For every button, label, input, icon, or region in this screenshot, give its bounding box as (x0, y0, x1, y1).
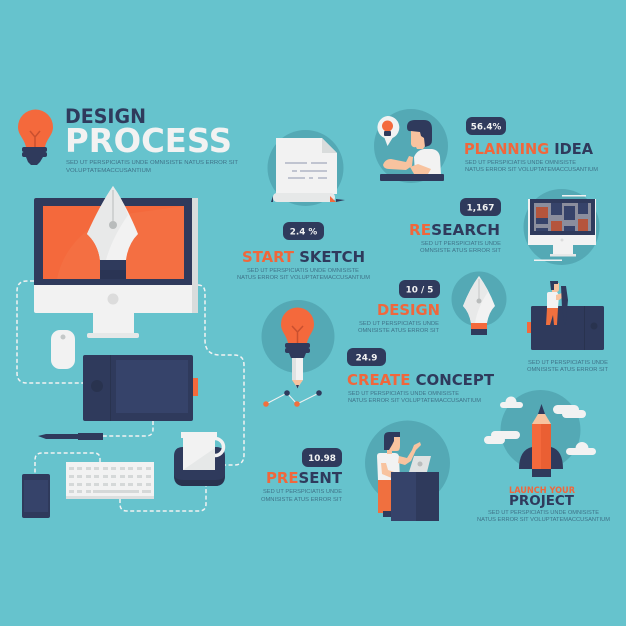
panel: research text (409, 198, 502, 254)
icon: smartphone (22, 474, 50, 518)
panel: launch your project text: LAUNCH YOUR (509, 486, 575, 496)
panel: tablet with designer illustration (527, 281, 604, 350)
icon: keyboard (66, 462, 154, 499)
panel: planning idea text: PLANNING IDEA (464, 140, 593, 158)
icon: graphics tablet (83, 355, 198, 421)
panel: design text: OMNISISTE ATUS ERROR SIT (358, 328, 440, 334)
panel: design text: 10 / 5 (406, 286, 433, 296)
panel: create concept text: 24.9 (356, 354, 377, 364)
panel: design text (358, 280, 440, 334)
panel: start sketch text: 2.4 % (290, 228, 317, 238)
panel: planning idea text: 56.4% (471, 122, 501, 132)
icon: title light bulb (18, 109, 53, 165)
panel: present text (261, 448, 343, 503)
panel: planning idea text: SED UT PERSPICIATIS UNDE OMNISISTE (465, 160, 576, 166)
panel: research text: SED UT PERSPICIATIS UNDE (421, 241, 501, 247)
text: tablet caption (527, 360, 609, 373)
text: tablet caption: SED UT PERSPICIATIS UNDE (528, 360, 608, 366)
icon: large pen nib (87, 186, 138, 279)
panel: research monitor illustration (524, 189, 600, 265)
dashed connector cables (17, 281, 244, 511)
panel: create concept text: SED UT PERSPICIATIS UNDE OMNISISTE (348, 391, 459, 397)
icon: mouse (51, 330, 75, 369)
panel: planning idea text: NATUS ERROR SIT VOLUPTATEMACCUSANTIUM (465, 167, 598, 173)
panel: design pen nib illustration (452, 272, 506, 335)
panel: start sketch text: START SKETCH (242, 248, 365, 266)
panel: present text: OMNISISTE ATUS ERROR SIT (261, 497, 343, 503)
panel: design text: DESIGN (377, 301, 440, 319)
panel: create concept text: CREATE CONCEPT (347, 371, 494, 389)
panel: launch rocket pencil illustration (484, 390, 596, 477)
panel: present text: 10.98 (308, 454, 336, 464)
panel: launch your project text: SED UT PERSPICIATIS UNDE OMNISISTE (488, 510, 599, 516)
panel: present text: SED UT PERSPICIATIS UNDE (263, 489, 342, 495)
panel: start sketch text: NATUS ERROR SIT VOLUPTATEMACCUSANTIUM (237, 275, 370, 281)
panel: planning idea text (464, 117, 598, 173)
title: VOLUPTATEMACCUSANTIUM (66, 168, 151, 174)
panel: present illustration (365, 420, 450, 521)
panel: create concept bulb illustration (262, 300, 334, 407)
main desktop monitor (34, 198, 198, 338)
icon: coffee mug on coaster (174, 432, 225, 486)
panel: present text: PRESENT (266, 469, 342, 487)
panel: design text: SED UT PERSPICIATIS UNDE (359, 321, 439, 327)
panel: start sketch text (237, 222, 370, 281)
panel: launch your project text: NATUS ERROR SIT VOLUPTATEMACCUSANTIUM (477, 517, 610, 523)
panel: start sketch document icon (268, 130, 345, 206)
panel: research text: OMNSISTE ATUS ERROR SIT (420, 248, 502, 254)
panel: research text: RESEARCH (409, 221, 500, 239)
icon: stylus pen (38, 433, 103, 440)
panel: create concept text: NATUS ERROR SIT VOLUPTATEMACCUSANTIUM (348, 398, 481, 404)
panel: research text: 1,167 (467, 204, 494, 214)
title: PROCESS (65, 121, 232, 160)
text: tablet caption: OMNISISTE ATUS ERROR SIT (527, 367, 609, 373)
panel: launch your project text: PROJECT (509, 493, 575, 509)
panel: planning idea illustration (374, 109, 448, 183)
panel: create concept text (347, 348, 494, 404)
panel: launch your project text (477, 486, 610, 523)
panel: start sketch text: SED UT PERSPICIATIS UNDE OMNISISTE (247, 268, 359, 274)
title (65, 105, 239, 174)
title: SED UT PERSPICIATIS UNDE OMNISISTE NATUS ERROR SIT (66, 160, 239, 166)
title: DESIGN (65, 105, 146, 128)
